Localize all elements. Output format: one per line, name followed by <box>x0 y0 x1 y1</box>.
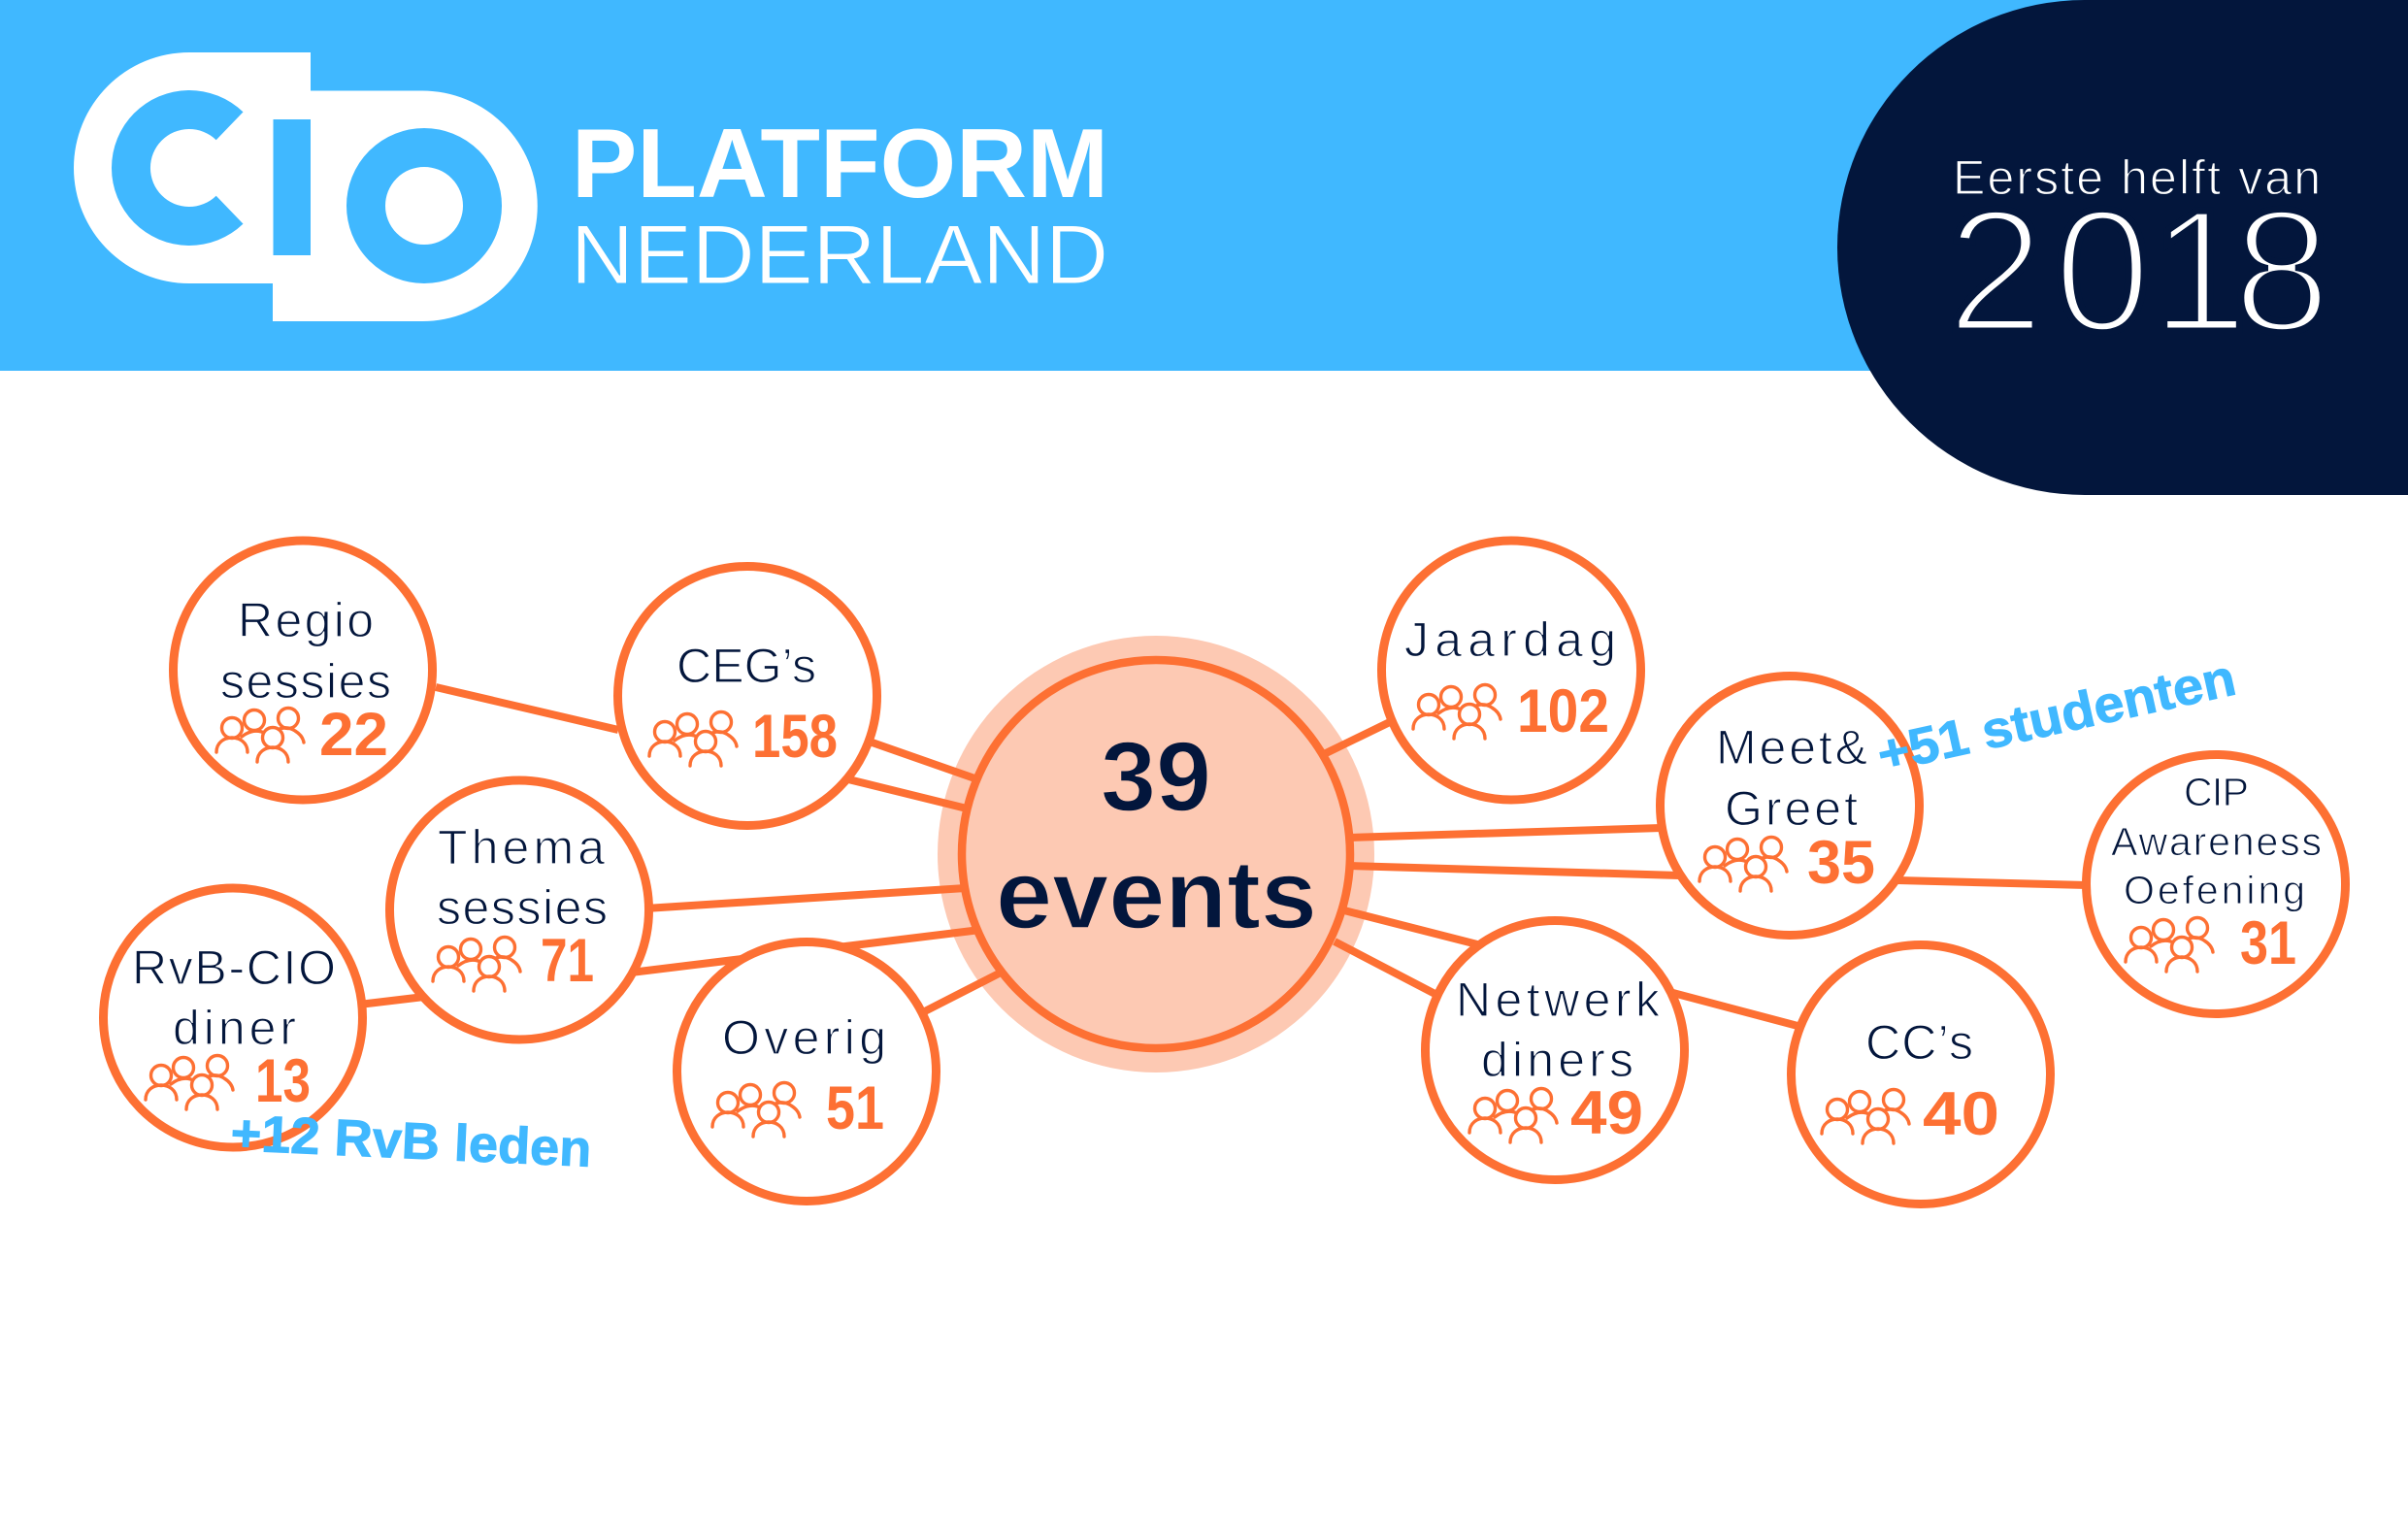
node: CIP Awareness Oefening: Awareness <box>2111 819 2322 864</box>
node: Regio sessies: 22 <box>319 701 388 769</box>
header band <box>0 0 2408 371</box>
icon: people <box>433 938 520 991</box>
connector lines <box>359 687 2087 1027</box>
label: events: events <box>996 841 1317 949</box>
node: Netwerk diners <box>1425 920 1685 1180</box>
node: CEG's: CEG’s <box>676 639 816 693</box>
central circle: 39 events <box>962 660 1350 1048</box>
node: CIP Awareness Oefening: CIP <box>2184 770 2249 814</box>
node: Meet & Greet: 35 <box>1807 829 1875 897</box>
node: CIP Awareness Oefening <box>2087 755 2345 1013</box>
node: CEG's <box>617 567 877 825</box>
node: CC's: 40 <box>1923 1080 1999 1148</box>
node: Thema sessies: 71 <box>541 927 594 995</box>
node: Regio sessies: sessies <box>220 654 391 709</box>
node: Overig <box>677 941 936 1202</box>
icon: people <box>1822 1089 1909 1143</box>
logo text: PLATFORM: PLATFORM <box>572 110 1108 218</box>
logo: CIO Platform Nederland <box>74 52 1108 321</box>
node: CEG's: 158 <box>752 703 838 771</box>
badge text: Eerste helft van: Eerste helft van <box>1953 150 2321 205</box>
node: Thema sessies: sessies <box>437 880 608 935</box>
node: Jaardag: Jaardag <box>1404 612 1616 667</box>
node: Jaardag: 102 <box>1517 677 1609 745</box>
count: 39: 39 <box>1101 723 1211 832</box>
node: Netwerk diners: diners <box>1481 1033 1633 1087</box>
node: Meet & Greet <box>1660 676 1920 936</box>
node: Thema sessies: Thema <box>438 820 605 874</box>
icon: people <box>146 1056 233 1109</box>
node: Meet & Greet: Greet <box>1725 781 1858 836</box>
node: CIP Awareness Oefening: 31 <box>2240 909 2296 977</box>
logo mark: CIO <box>74 52 538 321</box>
panel: date badge <box>1837 0 2408 495</box>
node: Jaardag <box>1382 541 1640 800</box>
node: Meet & Greet: Meet& <box>1716 720 1867 775</box>
node: RvB-CIO diner: RvB-CIO <box>132 940 336 995</box>
node: Overig: Overig <box>722 1010 886 1065</box>
logo text: NEDERLAND: NEDERLAND <box>571 209 1108 302</box>
icon: people <box>649 712 737 766</box>
central halo <box>938 636 1374 1072</box>
node: Regio sessies <box>173 541 433 800</box>
node: Overig: 51 <box>826 1074 884 1142</box>
node: RvB-CIO diner: diner <box>173 1001 296 1055</box>
icon: people <box>1413 685 1501 739</box>
node: Netwerk diners: Netwerk <box>1456 973 1661 1027</box>
node: RvB-CIO diner <box>103 888 363 1147</box>
node: CC's <box>1792 945 2050 1204</box>
node: Netwerk diners: 49 <box>1570 1079 1643 1147</box>
icon: people <box>712 1083 800 1137</box>
badge year: 2018: 2018 <box>1947 174 2330 369</box>
node: CC's: CC’s <box>1865 1015 1973 1070</box>
node: CIP Awareness Oefening: Oefening <box>2124 868 2305 912</box>
icon: people <box>1699 837 1787 891</box>
icon: people <box>2126 918 2213 972</box>
icon: people <box>1469 1089 1557 1142</box>
node: Regio sessies: Regio <box>238 593 374 647</box>
callout: +12 RvB leden: +12 RvB leden <box>229 1105 593 1178</box>
callout: +51 studenten: +51 studenten <box>1872 649 2241 784</box>
node: RvB-CIO diner: 13 <box>255 1047 311 1115</box>
node: Thema sessies <box>390 780 648 1040</box>
icon: people <box>216 709 304 762</box>
